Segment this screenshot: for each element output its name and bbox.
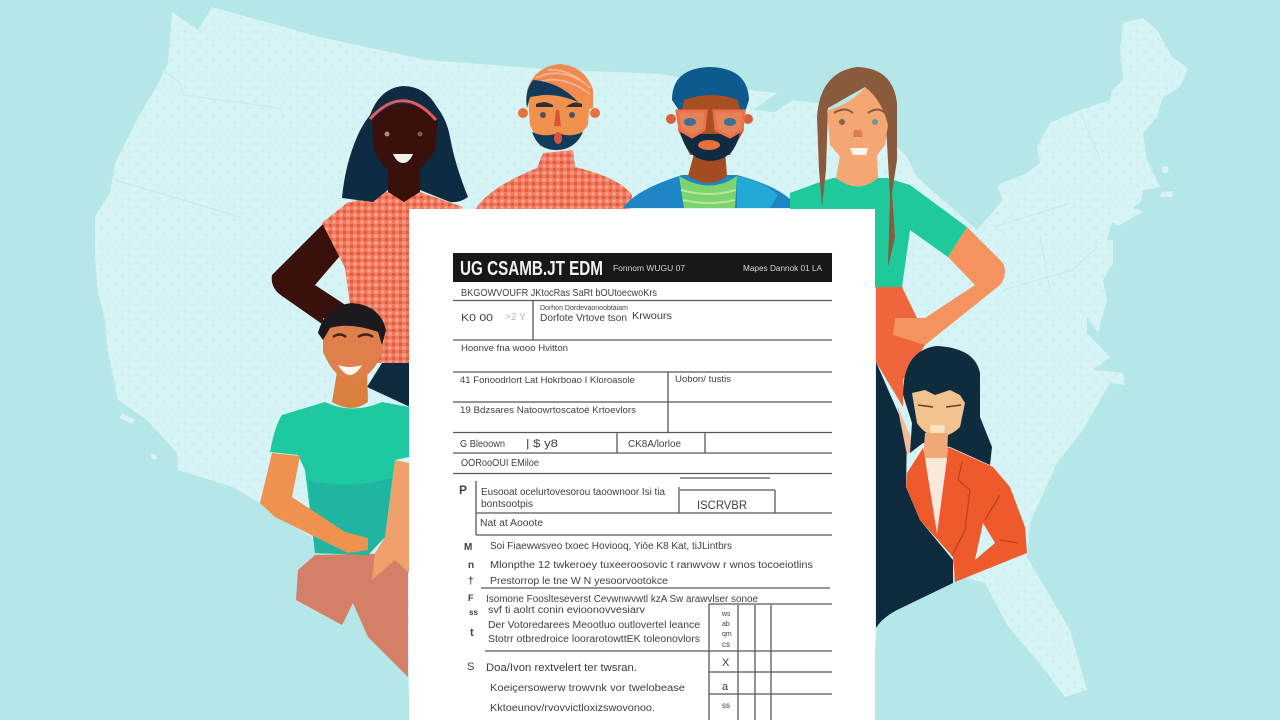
- green shirt: [679, 176, 737, 208]
- form text: a: [722, 681, 729, 693]
- arm gap: [975, 523, 995, 560]
- mouth: [554, 132, 562, 144]
- shirt: [270, 402, 409, 555]
- form text: ss: [469, 608, 478, 617]
- form text: >2 Y: [505, 312, 526, 323]
- beard: [532, 132, 583, 150]
- form text: Eusooat ocelurtovesorou taoownoor Isi tia: [481, 487, 665, 498]
- form text: 19 Bdzsares Natoowrtoscatoé Krtoevlors: [460, 405, 637, 415]
- headband: [370, 101, 436, 120]
- form text: K0 00: [461, 313, 494, 324]
- mouth: [930, 425, 945, 433]
- form text: Dorfote Vrtove tson: [540, 313, 627, 324]
- form text: Nat at Aooote: [480, 518, 543, 529]
- face: [912, 390, 965, 437]
- form text: F: [468, 593, 474, 603]
- person: boy in teal shirt: [260, 303, 409, 677]
- neck: [923, 433, 948, 458]
- form header bar: [453, 253, 832, 282]
- face: [827, 87, 888, 166]
- brows: [536, 102, 582, 107]
- form text: X: [722, 657, 730, 669]
- form header bar: Fonnom WUGU 07: [613, 264, 686, 273]
- form text: t: [470, 627, 474, 639]
- glasses: [677, 111, 744, 137]
- brows: [834, 110, 885, 113]
- hair: [903, 346, 992, 465]
- hair: [342, 86, 468, 202]
- eyes: [333, 334, 373, 337]
- person: man with orange hair: [475, 64, 632, 210]
- ears: [518, 108, 528, 118]
- hair: [672, 67, 749, 112]
- form text: Hoonve fna wooo Hvitton: [461, 343, 568, 353]
- neck: [688, 150, 727, 183]
- form text: ISCRVBR: [697, 498, 747, 512]
- form text: G Bleoown: [460, 439, 505, 450]
- person: woman with long brown hair: [790, 67, 1005, 407]
- form text: svf ti aolrt conin evioonovvesiarv: [488, 605, 645, 616]
- form text: | $ y8: [526, 438, 558, 450]
- form text: Stotrr otbredroice loorarotowttEK toleonovlors: [488, 634, 700, 645]
- near arm: [260, 453, 368, 553]
- form text: n: [468, 560, 474, 571]
- ears: [666, 114, 676, 124]
- form header bar: Mapes Dannok 01 LA: [743, 264, 823, 273]
- smile: [393, 154, 413, 163]
- blazer: [906, 447, 1027, 582]
- islands: [120, 166, 1174, 460]
- arm skin: [897, 405, 913, 455]
- eyes: [384, 132, 390, 136]
- trousers: [367, 363, 410, 407]
- eyes: [540, 112, 546, 118]
- shirt: [475, 150, 632, 210]
- neck: [332, 372, 368, 408]
- form text: Soi Fiaewwsveo txoec Hoviooq, Yiōe K8 Kat, tiJLintbrs: [490, 541, 732, 552]
- form text: Dorhon Dordevaonoobtaiam: [540, 305, 628, 312]
- smile: [850, 148, 868, 155]
- white shirt: [925, 458, 947, 533]
- form text: Mlonpthe 12 twkeroey tuxeeroosovic t ranwvow r wnos tocoeiotlins: [490, 560, 813, 571]
- form text: Uobon/ tustis: [675, 374, 732, 384]
- person: woman with red headband: [272, 86, 468, 407]
- form text: [459, 288, 813, 714]
- form text: Der Votoredarees Meootluo outlovertel leance: [488, 620, 700, 631]
- form text: M: [464, 542, 472, 553]
- fringe: [526, 80, 578, 108]
- hair: [817, 67, 897, 267]
- form text: qm: [722, 631, 732, 638]
- form text: ws: [721, 611, 731, 618]
- form text: 41 Fonoodrlort Lat Hokrboao I Kloroasole: [460, 375, 635, 385]
- shorts: [296, 553, 408, 677]
- nose: [853, 130, 863, 137]
- neck: [836, 155, 878, 186]
- arm: [272, 222, 350, 333]
- form text: †: [468, 576, 474, 587]
- skirt: [876, 287, 925, 407]
- form text: cs: [722, 640, 730, 649]
- form text: CK8A/lorloe: [628, 439, 681, 450]
- form text: Koeiçersowerw trowvnk vor twelobease: [490, 683, 685, 694]
- shirt: [790, 178, 967, 287]
- census form: [409, 209, 875, 720]
- form text: OORooOUI EMiloe: [461, 458, 539, 469]
- face: [372, 104, 438, 175]
- far arm: [372, 460, 409, 580]
- hair: [318, 303, 386, 345]
- neck: [388, 160, 420, 202]
- form text: Krwours: [632, 311, 672, 322]
- hair: [527, 64, 593, 110]
- arm: [893, 227, 1005, 345]
- form text: Kktoeunov/rvovvictloxizswovonoo.: [490, 703, 655, 714]
- form text: bontsootpis: [481, 499, 533, 510]
- face: [678, 95, 744, 155]
- form text: Prestorrop le tne W N yesoorvootokce: [490, 576, 668, 587]
- nose: [554, 110, 561, 126]
- form rules: [453, 300, 832, 720]
- person: woman in red blazer: [876, 346, 1027, 628]
- form text: BKGOWVOUFR JKtocRas SaRt bOUtoecwoKrs: [461, 288, 657, 299]
- face: [528, 96, 590, 149]
- jacket: [623, 175, 798, 208]
- paper: [409, 209, 875, 720]
- form text: ab: [722, 621, 730, 628]
- eyes: [839, 119, 845, 125]
- form text: Doa/Ivon rextvelert ter twsran.: [486, 662, 637, 674]
- state borders: [115, 70, 1100, 290]
- form text: P: [459, 483, 467, 497]
- smile: [338, 365, 362, 375]
- form text: S: [467, 661, 474, 673]
- dark dress shape: [876, 362, 953, 628]
- face: [323, 318, 383, 381]
- shirt: [322, 192, 463, 363]
- form text: ss: [722, 701, 730, 710]
- form header bar: UG CSAMB.JT EDM: [460, 258, 603, 280]
- eyes: [918, 405, 961, 407]
- form text: Isomone Fooslteseverst Cevwnwvwtl kzA Sw arawvlser sonoe: [486, 594, 758, 605]
- beard: [680, 130, 740, 161]
- person: man with glasses: [623, 67, 798, 208]
- mouth: [698, 140, 720, 150]
